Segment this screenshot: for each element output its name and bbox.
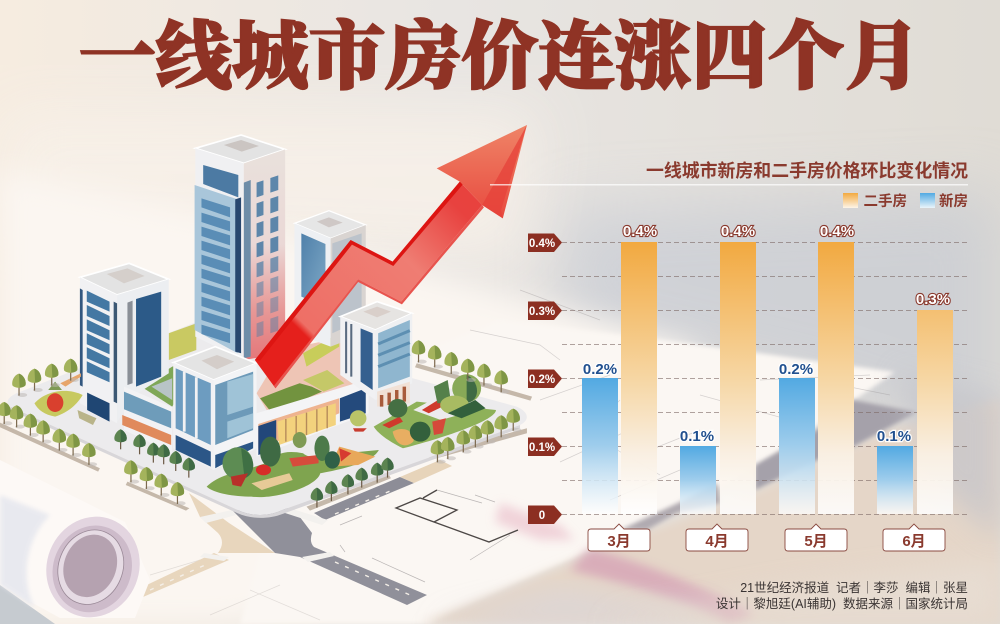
month labels: 4月 bbox=[705, 533, 729, 550]
month labels: 5月 bbox=[804, 533, 828, 550]
rolled blueprint bbox=[0, 460, 155, 624]
tower: front right bbox=[340, 302, 412, 407]
legend bbox=[843, 192, 968, 210]
gridlines bbox=[562, 242, 968, 514]
street trees bbox=[0, 340, 521, 508]
May bars: 0.4% bbox=[820, 223, 854, 240]
y axis tags: 0 bbox=[539, 510, 545, 522]
y axis tags: 0.2% bbox=[529, 374, 555, 386]
April bars: 0.4% bbox=[721, 223, 755, 240]
credits: 21世纪经济报道 记者｜李莎 编辑｜张星 bbox=[740, 580, 968, 595]
March bars: 0.2% bbox=[583, 361, 617, 378]
landscaped gardens bbox=[34, 373, 496, 497]
site base plate bbox=[8, 322, 527, 515]
roof garden and courtyard bbox=[141, 323, 365, 413]
month labels: 6月 bbox=[902, 533, 926, 550]
isometric city block illustration bbox=[0, 125, 532, 518]
city streets and intersection bbox=[132, 460, 452, 605]
red rising arrow bbox=[255, 125, 527, 388]
tower: tall centre bbox=[195, 135, 285, 360]
bar chart: month-on-month price change bbox=[528, 223, 968, 551]
June bars bbox=[877, 291, 953, 514]
podium wing bbox=[122, 387, 172, 453]
April bars: 0.1% bbox=[680, 428, 714, 445]
tower: back right bbox=[294, 211, 366, 347]
title: 一线城市房价连涨四个月 bbox=[79, 0, 921, 104]
June bars: 0.1% bbox=[877, 428, 911, 445]
May bars bbox=[779, 223, 854, 514]
heading underline bbox=[490, 184, 968, 186]
y axis tags: 0.3% bbox=[529, 306, 555, 318]
credits: 设计｜黎旭廷(AI辅助) 数据来源｜国家统计局 bbox=[716, 596, 968, 611]
blueprint plan drawing lines bbox=[30, 290, 890, 620]
March bars: 0.4% bbox=[623, 223, 657, 240]
May bars: 0.2% bbox=[779, 361, 813, 378]
April bars bbox=[680, 223, 756, 514]
June bars: 0.3% bbox=[916, 291, 950, 308]
y axis tags: 0.1% bbox=[529, 442, 555, 454]
y axis tags bbox=[528, 234, 562, 524]
month labels bbox=[588, 524, 945, 551]
month labels: 3月 bbox=[607, 533, 631, 550]
tower: front centre bbox=[173, 347, 257, 470]
tree planter strips bbox=[0, 363, 532, 511]
chart heading: 一线城市新房和二手房价格环比变化情况 bbox=[646, 160, 968, 181]
legend: new homes: 新房 bbox=[939, 192, 968, 210]
y axis tags: 0.4% bbox=[529, 238, 555, 250]
credits bbox=[716, 580, 968, 611]
March bars bbox=[582, 223, 657, 514]
tower: left bbox=[80, 263, 169, 423]
legend: second-hand homes: 二手房 bbox=[864, 193, 907, 210]
podium shopfront bbox=[257, 379, 369, 457]
